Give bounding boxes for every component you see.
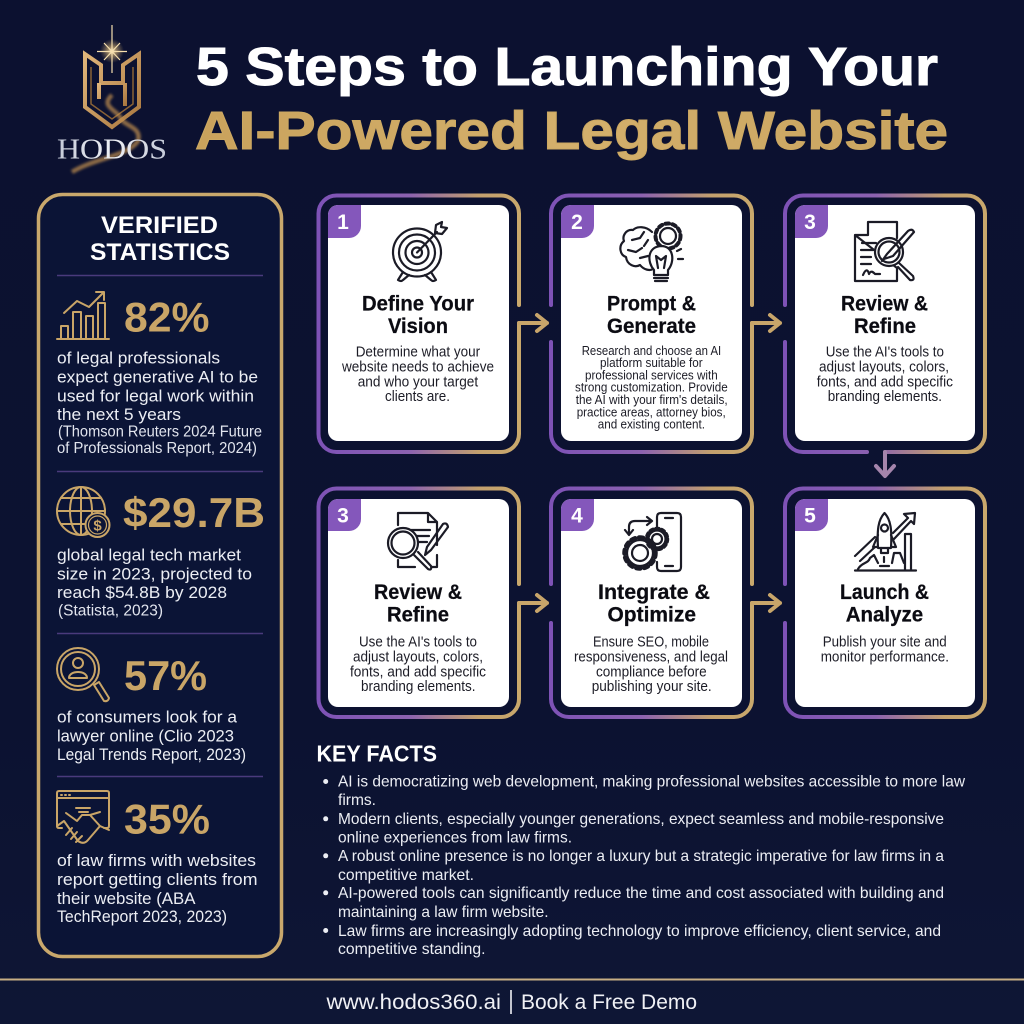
step title	[607, 292, 696, 338]
step title: Vision	[388, 314, 448, 338]
panel: verified statistics	[38, 194, 282, 956]
arrow: step 1 to 2	[519, 315, 547, 331]
step description: practice areas, attorney bios,	[577, 405, 726, 420]
icon: globe with dollar	[57, 487, 110, 537]
step title: Prompt &	[607, 292, 696, 316]
title: AI-Powered Legal Website	[195, 101, 948, 161]
bullet: modern clients: online experiences from law firms.	[338, 830, 572, 846]
statistic text: of law firms with websites	[57, 851, 256, 870]
step title: Launch &	[840, 580, 929, 604]
bullet: AI-powered tools: AI-powered tools can significantly reduce the time and cost associated with building and	[338, 885, 944, 902]
bullet: democratizing: firms.	[338, 792, 376, 809]
bullet: online presence	[323, 848, 944, 884]
icon: rising bar chart	[57, 292, 109, 339]
step description: and existing content.	[598, 417, 705, 432]
step description: monitor performance.	[821, 649, 949, 666]
bullet: modern clients: Modern clients, especially younger generations, expect seamless and mobile-responsive	[338, 811, 944, 828]
step 1 card: Define Your Vision: 1	[337, 211, 349, 234]
statistic text: (Statista, 2023)	[58, 603, 163, 620]
icon: globe with dollar: $	[93, 518, 102, 534]
arrow: step 2 to 3	[752, 315, 780, 331]
footer: www.hodos360.ai	[325, 991, 501, 1014]
step description: publishing your site.	[592, 678, 712, 695]
bullet: online presence: A robust online presence is no longer a luxury but a strategic imperative for law firms in a	[338, 848, 944, 865]
statistic text: of consumers look for a	[57, 708, 238, 727]
bullet: adopting technology: Law firms are increasingly adopting technology to improve efficiency, client service, and	[338, 923, 941, 940]
step 4 card: Integrate & Optimize: 4	[571, 505, 583, 528]
step title	[841, 292, 928, 338]
step description: Ensure SEO, mobile	[593, 634, 709, 651]
statistic text	[57, 708, 246, 764]
step 2 card: Prompt & Generate	[551, 196, 752, 452]
step description: branding elements.	[361, 678, 476, 695]
statistic: 35%	[57, 791, 258, 926]
bullet: democratizing: AI is democratizing web development, making professional websites accessible to more law	[338, 774, 965, 791]
footer	[325, 990, 697, 1014]
step description	[341, 344, 494, 405]
step description: fonts, and add specific	[350, 664, 486, 681]
step description: fonts, and add specific	[817, 374, 953, 391]
icon: magnifier with person	[57, 648, 109, 701]
step description: the AI with your firm's details,	[576, 392, 728, 407]
statistic text: the next 5 years	[57, 405, 181, 424]
step title: Analyze	[846, 603, 923, 627]
statistic: 82%: 82%	[124, 294, 210, 340]
step description: Use the AI's tools to	[359, 634, 477, 651]
step description: website needs to achieve	[341, 359, 494, 376]
bullet: adopting technology: competitive standing.	[338, 941, 486, 958]
step description	[574, 634, 728, 695]
panel heading: VERIFIED	[101, 212, 218, 239]
step description: Determine what your	[356, 344, 480, 361]
bullet: adopting technology	[323, 923, 941, 958]
bullet: modern clients	[323, 811, 944, 846]
step description	[817, 344, 953, 405]
statistic text: of legal professionals	[57, 348, 220, 367]
step description: and who your target	[358, 374, 479, 391]
statistic text	[57, 546, 252, 620]
statistic text: size in 2023, projected to	[57, 564, 252, 583]
title: 5 Steps to Launching Your	[196, 37, 938, 97]
statistic: $29.7B	[57, 487, 265, 620]
step description: branding elements.	[828, 388, 942, 405]
step title: Review &	[841, 292, 928, 316]
statistic text: report getting clients from	[57, 870, 258, 889]
logo: Hodos	[57, 25, 167, 172]
panel heading	[90, 212, 230, 266]
step title: Define Your	[362, 292, 475, 316]
key facts heading: KEY FACTS	[316, 741, 437, 767]
step 4 card: Integrate & Optimize	[551, 488, 752, 717]
icon: brain, bulb and gear	[620, 224, 683, 281]
footer: Book a Free Demo	[521, 991, 697, 1014]
statistic: 57%: 57%	[124, 652, 207, 699]
step description: clients are.	[385, 388, 450, 405]
icon: browser with handshake	[57, 791, 109, 843]
bullet: democratizing	[323, 774, 965, 809]
logo: Hodos: HODOS	[57, 134, 167, 166]
step 3 card: Review & Refine	[785, 196, 985, 452]
step description: strong customization. Provide	[575, 380, 728, 395]
step description: Publish your site and	[823, 634, 947, 651]
step 3 card: Review & Refine: 3	[804, 211, 816, 234]
icon: gears with phone	[624, 513, 681, 571]
title	[195, 37, 948, 161]
step title: Refine	[854, 314, 916, 338]
step description: responsiveness, and legal	[574, 649, 728, 666]
statistic text: global legal tech market	[57, 546, 241, 565]
statistic text	[57, 851, 258, 926]
icon: document with magnifier and pen	[388, 513, 448, 570]
step title	[598, 580, 710, 627]
panel heading: STATISTICS	[90, 239, 230, 266]
step 5 card: Launch & Analyze: 5	[804, 505, 816, 528]
step 2 card: Prompt & Generate: 2	[571, 211, 583, 234]
step 3 repeat card: Review & Refine	[318, 488, 519, 717]
step 3 repeat card: Review & Refine: 3	[337, 505, 349, 528]
statistic text: used for legal work within	[57, 386, 254, 405]
bullet: AI-powered tools: maintaining a law firm website.	[338, 904, 548, 921]
step description: Use the AI's tools to	[826, 344, 944, 361]
statistic: 57%	[57, 648, 246, 764]
step description: platform suitable for	[600, 355, 703, 370]
icon: rocket with growth arrow	[855, 513, 916, 570]
step title: Refine	[387, 603, 449, 627]
statistic text: their website (ABA	[57, 889, 196, 908]
arrow: step 4 to 5	[752, 595, 780, 611]
step description: adjust layouts, colors,	[819, 359, 949, 376]
key facts section	[316, 741, 965, 958]
arrow: repeat step 3 to 4	[519, 595, 547, 611]
statistic text: TechReport 2023, 2023)	[57, 907, 227, 926]
bullet: online presence: competitive market.	[338, 867, 474, 884]
step description	[821, 634, 949, 666]
statistic text: lawyer online (Clio 2023	[57, 727, 234, 746]
step title	[362, 292, 475, 338]
statistic text: reach $54.8B by 2028	[57, 583, 227, 602]
statistic text: of Professionals Report, 2024)	[57, 440, 257, 457]
statistic text: expect generative AI to be	[57, 367, 258, 386]
step 1 card: Define Your Vision	[318, 196, 519, 452]
bullet: AI-powered tools	[323, 885, 944, 921]
step title: Generate	[607, 314, 696, 338]
icon: target with arrow	[393, 222, 447, 281]
step title: Integrate &	[598, 580, 710, 604]
step description: adjust layouts, colors,	[353, 649, 483, 666]
step description: compliance before	[596, 664, 707, 681]
step title: Review &	[374, 580, 462, 604]
statistic: 82%	[57, 292, 262, 457]
statistic: $29.7B: $29.7B	[123, 489, 265, 536]
statistic text: Legal Trends Report, 2023)	[57, 745, 246, 764]
step description: professional services with	[585, 367, 718, 382]
statistic text: (Thomson Reuters 2024 Future	[58, 424, 262, 441]
arrow: step 3 down to 5	[876, 452, 894, 476]
step title	[840, 580, 929, 627]
step title	[374, 580, 462, 627]
step title: Optimize	[608, 603, 696, 627]
step description	[350, 634, 486, 695]
statistic: 35%: 35%	[124, 795, 210, 842]
icon: document with magnifier and pen	[855, 222, 914, 281]
step description: Research and choose an AI	[582, 343, 721, 358]
step 5 card: Launch & Analyze	[785, 488, 985, 717]
statistic text	[57, 348, 262, 457]
step description	[575, 343, 728, 432]
